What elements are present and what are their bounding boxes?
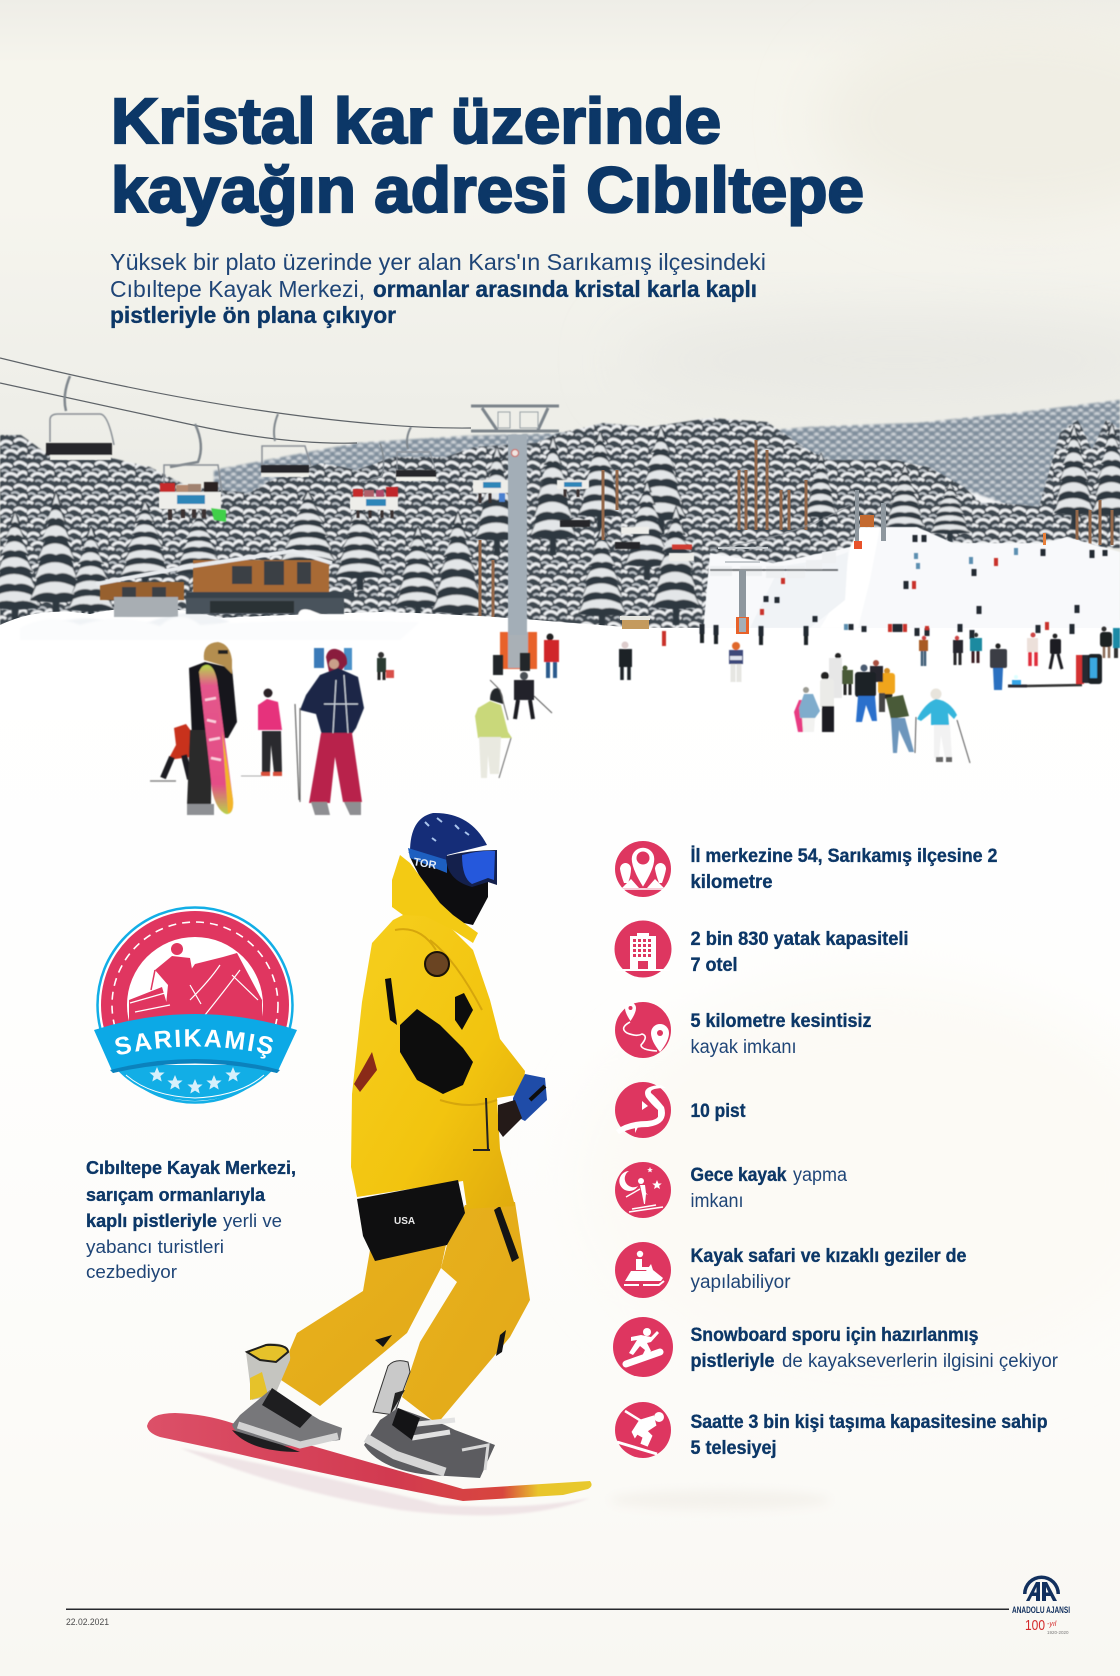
icon: route (615, 1002, 671, 1058)
ribbon (94, 1014, 297, 1073)
distant chairs (710, 505, 850, 578)
list item: hotels: 2 bin 830 yatak kapasiteli (690, 929, 908, 950)
subtitle: pistleriyle ön plana çıkıyor (110, 302, 396, 328)
tree trunks (480, 440, 1112, 625)
list item: snowboard: de kayakseverlerin ilgisini çekiyor (782, 1351, 1059, 1372)
list item: distance: İl merkezine 54, Sarıkamış ilçesine 2 (690, 846, 998, 867)
snowmobile machine (1076, 654, 1102, 684)
person: brown orange (919, 636, 928, 666)
icon: skier (615, 1402, 671, 1458)
logo: Anadolu Ajansı (1012, 1576, 1070, 1635)
chair 1 (46, 376, 114, 460)
chair 5 (396, 427, 436, 481)
snowboarder: USA (394, 1216, 415, 1227)
badge: Sarıkamış: SARIKAMIŞ (115, 1029, 273, 1058)
person: dark near (953, 636, 963, 665)
list item: ski safari: yapılabiliyor (690, 1272, 791, 1293)
zipper and straps (473, 1098, 490, 1150)
left description text: yabancı turistleri (86, 1236, 224, 1257)
left description text: kaplı pistleriyle (86, 1210, 217, 1231)
icon: hotel (614, 920, 672, 978)
list item: uninterrupted skiing: 5 kilometre kesintisiz (690, 1011, 872, 1032)
chairlifts (46, 376, 850, 578)
child in red (150, 724, 194, 781)
left description text: cezbediyor (86, 1261, 177, 1282)
chair 3 (261, 414, 311, 477)
list item: snowboard: Snowboard sporu için hazırlanmış (690, 1325, 978, 1346)
list item: snowboard (613, 1317, 1059, 1377)
lift tower (471, 406, 559, 669)
kid and board on snow (1008, 675, 1082, 686)
list item: night skiing: Gece kayak (690, 1165, 787, 1186)
left description text (86, 1157, 296, 1282)
list item: snowboard: pistleriyle (690, 1351, 774, 1372)
icon: winding piste (615, 1082, 671, 1138)
list item: ten slopes: 10 pist (690, 1101, 746, 1122)
child group (794, 687, 820, 732)
footer line (66, 1608, 1009, 1610)
date: 22.02.2021 (66, 1617, 109, 1627)
title: kayağın adresi Cıbıltepe (111, 154, 864, 226)
band text: TOR (412, 856, 437, 872)
list item: distance (615, 841, 998, 897)
skiers group at right (794, 626, 1120, 763)
black jacket patches (400, 1009, 473, 1094)
ribbon name (100, 1046, 290, 1060)
woman in navy jacket (295, 649, 364, 815)
skiers at left foreground (150, 642, 512, 815)
mountains and skier (129, 943, 262, 1032)
rear trouser leg (278, 1240, 447, 1406)
list item: night skiing: imkanı (690, 1191, 744, 1212)
person: grey top blue jeans (990, 643, 1007, 690)
person: orange jacket (878, 668, 895, 712)
person: navy jacket blue trousers (855, 664, 877, 722)
icon: snowboarder (613, 1317, 673, 1377)
list item: night skiing: yapma (793, 1165, 847, 1186)
agency name: ANADOLU AJANSI (1012, 1605, 1070, 1615)
list item: hotels: 7 otel (690, 955, 738, 976)
logo mark (1023, 1576, 1060, 1601)
persons at right edge (1100, 626, 1120, 658)
list item: chairlifts: Saatte 3 bin kişi taşıma kapasitesine sahip (690, 1412, 1048, 1433)
left description text: Cıbıltepe Kayak Merkezi, (86, 1157, 296, 1178)
snowy slope (703, 527, 1120, 632)
badge: Sarıkamış (94, 906, 297, 1104)
list item: night skiing (615, 1162, 847, 1218)
subtitle (110, 249, 766, 328)
list item: ten slopes (615, 1082, 746, 1138)
person: white tall (829, 653, 842, 698)
goggles (446, 850, 497, 887)
list item: ski safari (615, 1242, 966, 1298)
icon: snowmobile (615, 1242, 671, 1298)
snow spray (180, 1448, 590, 1515)
list item: chairlifts: 5 telesiyej (690, 1438, 776, 1459)
left description text: sarıçam ormanlarıyla (86, 1184, 266, 1205)
ground snow (0, 608, 1120, 720)
subtitle: Yüksek bir plato üzerinde yer alan Kars'ın Sarıkamış ilçesindeki (110, 249, 766, 275)
subtitle: Cıbıltepe Kayak Merkezi, (110, 276, 365, 302)
ski lodge (96, 551, 354, 622)
gloves (513, 1074, 547, 1121)
list item: distance: kilometre (690, 872, 772, 893)
list item: hotels (614, 920, 908, 978)
further lift towers (718, 490, 1046, 634)
distant forested hills (214, 400, 1120, 520)
cabin (620, 616, 650, 629)
stars (149, 1067, 241, 1093)
list item: uninterrupted skiing: kayak imkanı (690, 1037, 796, 1058)
lower blue section (113, 1065, 277, 1101)
snowboarder (147, 813, 592, 1515)
subtitle: ormanlar arasında kristal karla kaplı (373, 276, 757, 302)
snow mounds (20, 617, 420, 640)
list item: ski safari: Kayak safari ve kızaklı geziler de (690, 1246, 966, 1267)
face mask (410, 857, 488, 925)
person: white coat (820, 672, 834, 732)
hood (392, 855, 478, 943)
person: light blue jacket (915, 688, 970, 763)
title (111, 85, 864, 226)
goggle strap (408, 848, 447, 873)
list item: uninterrupted skiing (615, 1002, 872, 1058)
person in lime jacket (475, 680, 512, 778)
chair signs near tower (473, 480, 694, 561)
icon: location pins (615, 841, 671, 897)
child in pink (241, 688, 282, 776)
jacket (351, 915, 525, 1209)
logo: Anadolu Ajansı: -yıl (1047, 1621, 1057, 1628)
chair 4 with riders (350, 443, 398, 518)
black waist pocket (357, 1180, 465, 1261)
badges on jacket (425, 952, 449, 976)
person: white and red (1027, 632, 1038, 666)
person: teal (970, 633, 982, 663)
anniversary mark: 100 (1025, 1617, 1045, 1634)
person: dark (870, 660, 883, 682)
title: Kristal kar üzerinde (111, 85, 721, 157)
snowboard (147, 1413, 592, 1501)
list item: chairlifts (615, 1402, 1048, 1459)
person: olive jacket (884, 690, 914, 753)
forest mass (0, 418, 1120, 628)
lift cables (0, 358, 471, 443)
rear binding and boot (232, 1343, 342, 1452)
beanie (408, 813, 487, 872)
distant skiers (664, 535, 1105, 646)
person: black (1050, 634, 1062, 669)
chair 2 with riders (159, 424, 226, 522)
front trouser leg (402, 1202, 530, 1424)
front binding and boot (364, 1361, 495, 1478)
person: green small (842, 666, 853, 695)
woman with snowboard (187, 642, 237, 815)
logo: Anadolu Ajansı: 1920-2020 (1047, 1630, 1069, 1635)
icon: night skier (615, 1162, 671, 1218)
photo: ski resort scene (0, 358, 1120, 815)
skiers mid-distance (314, 634, 743, 719)
left description text: yerli ve (223, 1210, 282, 1231)
snow-covered pine trees (0, 422, 1120, 630)
trouser straps (494, 1206, 519, 1262)
